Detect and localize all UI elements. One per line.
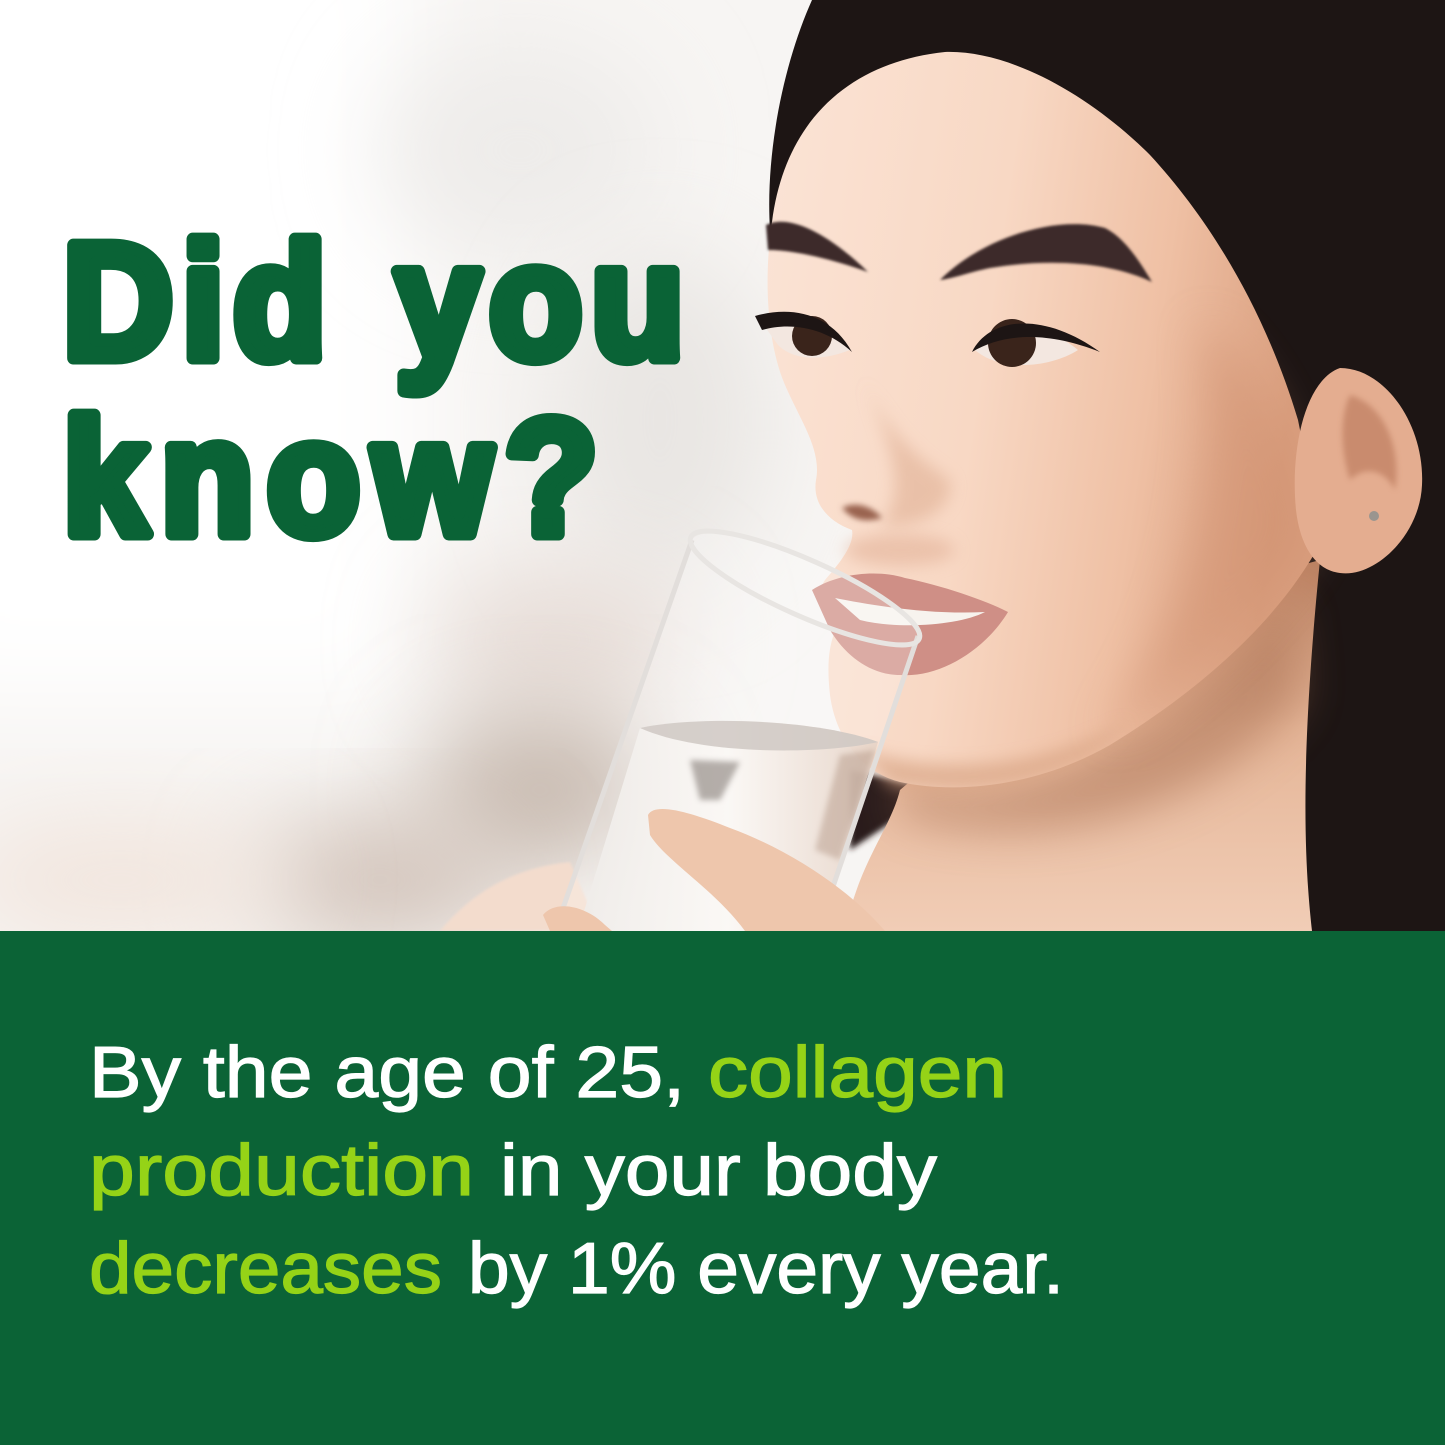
nostril bbox=[842, 505, 882, 520]
headline: Did you know? bbox=[63, 210, 684, 569]
right eyebrow bbox=[940, 224, 1152, 282]
left eye bbox=[755, 312, 852, 358]
thumb bbox=[543, 906, 612, 931]
cheek and temple shading bbox=[1130, 350, 1324, 707]
headline: Did you know?: know? bbox=[63, 386, 598, 569]
face bbox=[768, 52, 1322, 787]
ear inner shadow bbox=[1342, 395, 1397, 490]
blurred window background bbox=[0, 0, 770, 940]
hair back bbox=[769, 0, 1445, 931]
lower face shading bbox=[870, 734, 1108, 797]
shoulder bbox=[440, 862, 600, 931]
fact text block: decreases bbox=[89, 1229, 442, 1309]
headline: Did you know?: Did you bbox=[63, 210, 684, 393]
philtrum shading bbox=[845, 534, 955, 566]
fingers holding glass bbox=[648, 809, 885, 931]
earring bbox=[1369, 511, 1379, 521]
fact text block: by 1% every year. bbox=[468, 1229, 1064, 1309]
right eye bbox=[972, 319, 1100, 367]
lips bbox=[812, 574, 1008, 675]
ear bbox=[1295, 368, 1422, 573]
neck shadow bbox=[900, 600, 1300, 830]
nose shadow bbox=[880, 418, 954, 529]
fact text block: collagen bbox=[708, 1033, 1007, 1113]
left eyebrow bbox=[766, 222, 868, 272]
fact text block: production bbox=[89, 1131, 474, 1211]
fact text block bbox=[89, 1033, 1064, 1309]
hair strand under jaw bbox=[848, 770, 908, 853]
glass of water bbox=[561, 531, 922, 916]
fact text block: in your body bbox=[500, 1131, 937, 1211]
fact text block: By the age of 25, bbox=[89, 1033, 685, 1113]
neck and chest bbox=[845, 560, 1320, 931]
panel: green fact band bbox=[0, 931, 1445, 1445]
photo: woman drinking a glass of water bbox=[0, 0, 1445, 940]
